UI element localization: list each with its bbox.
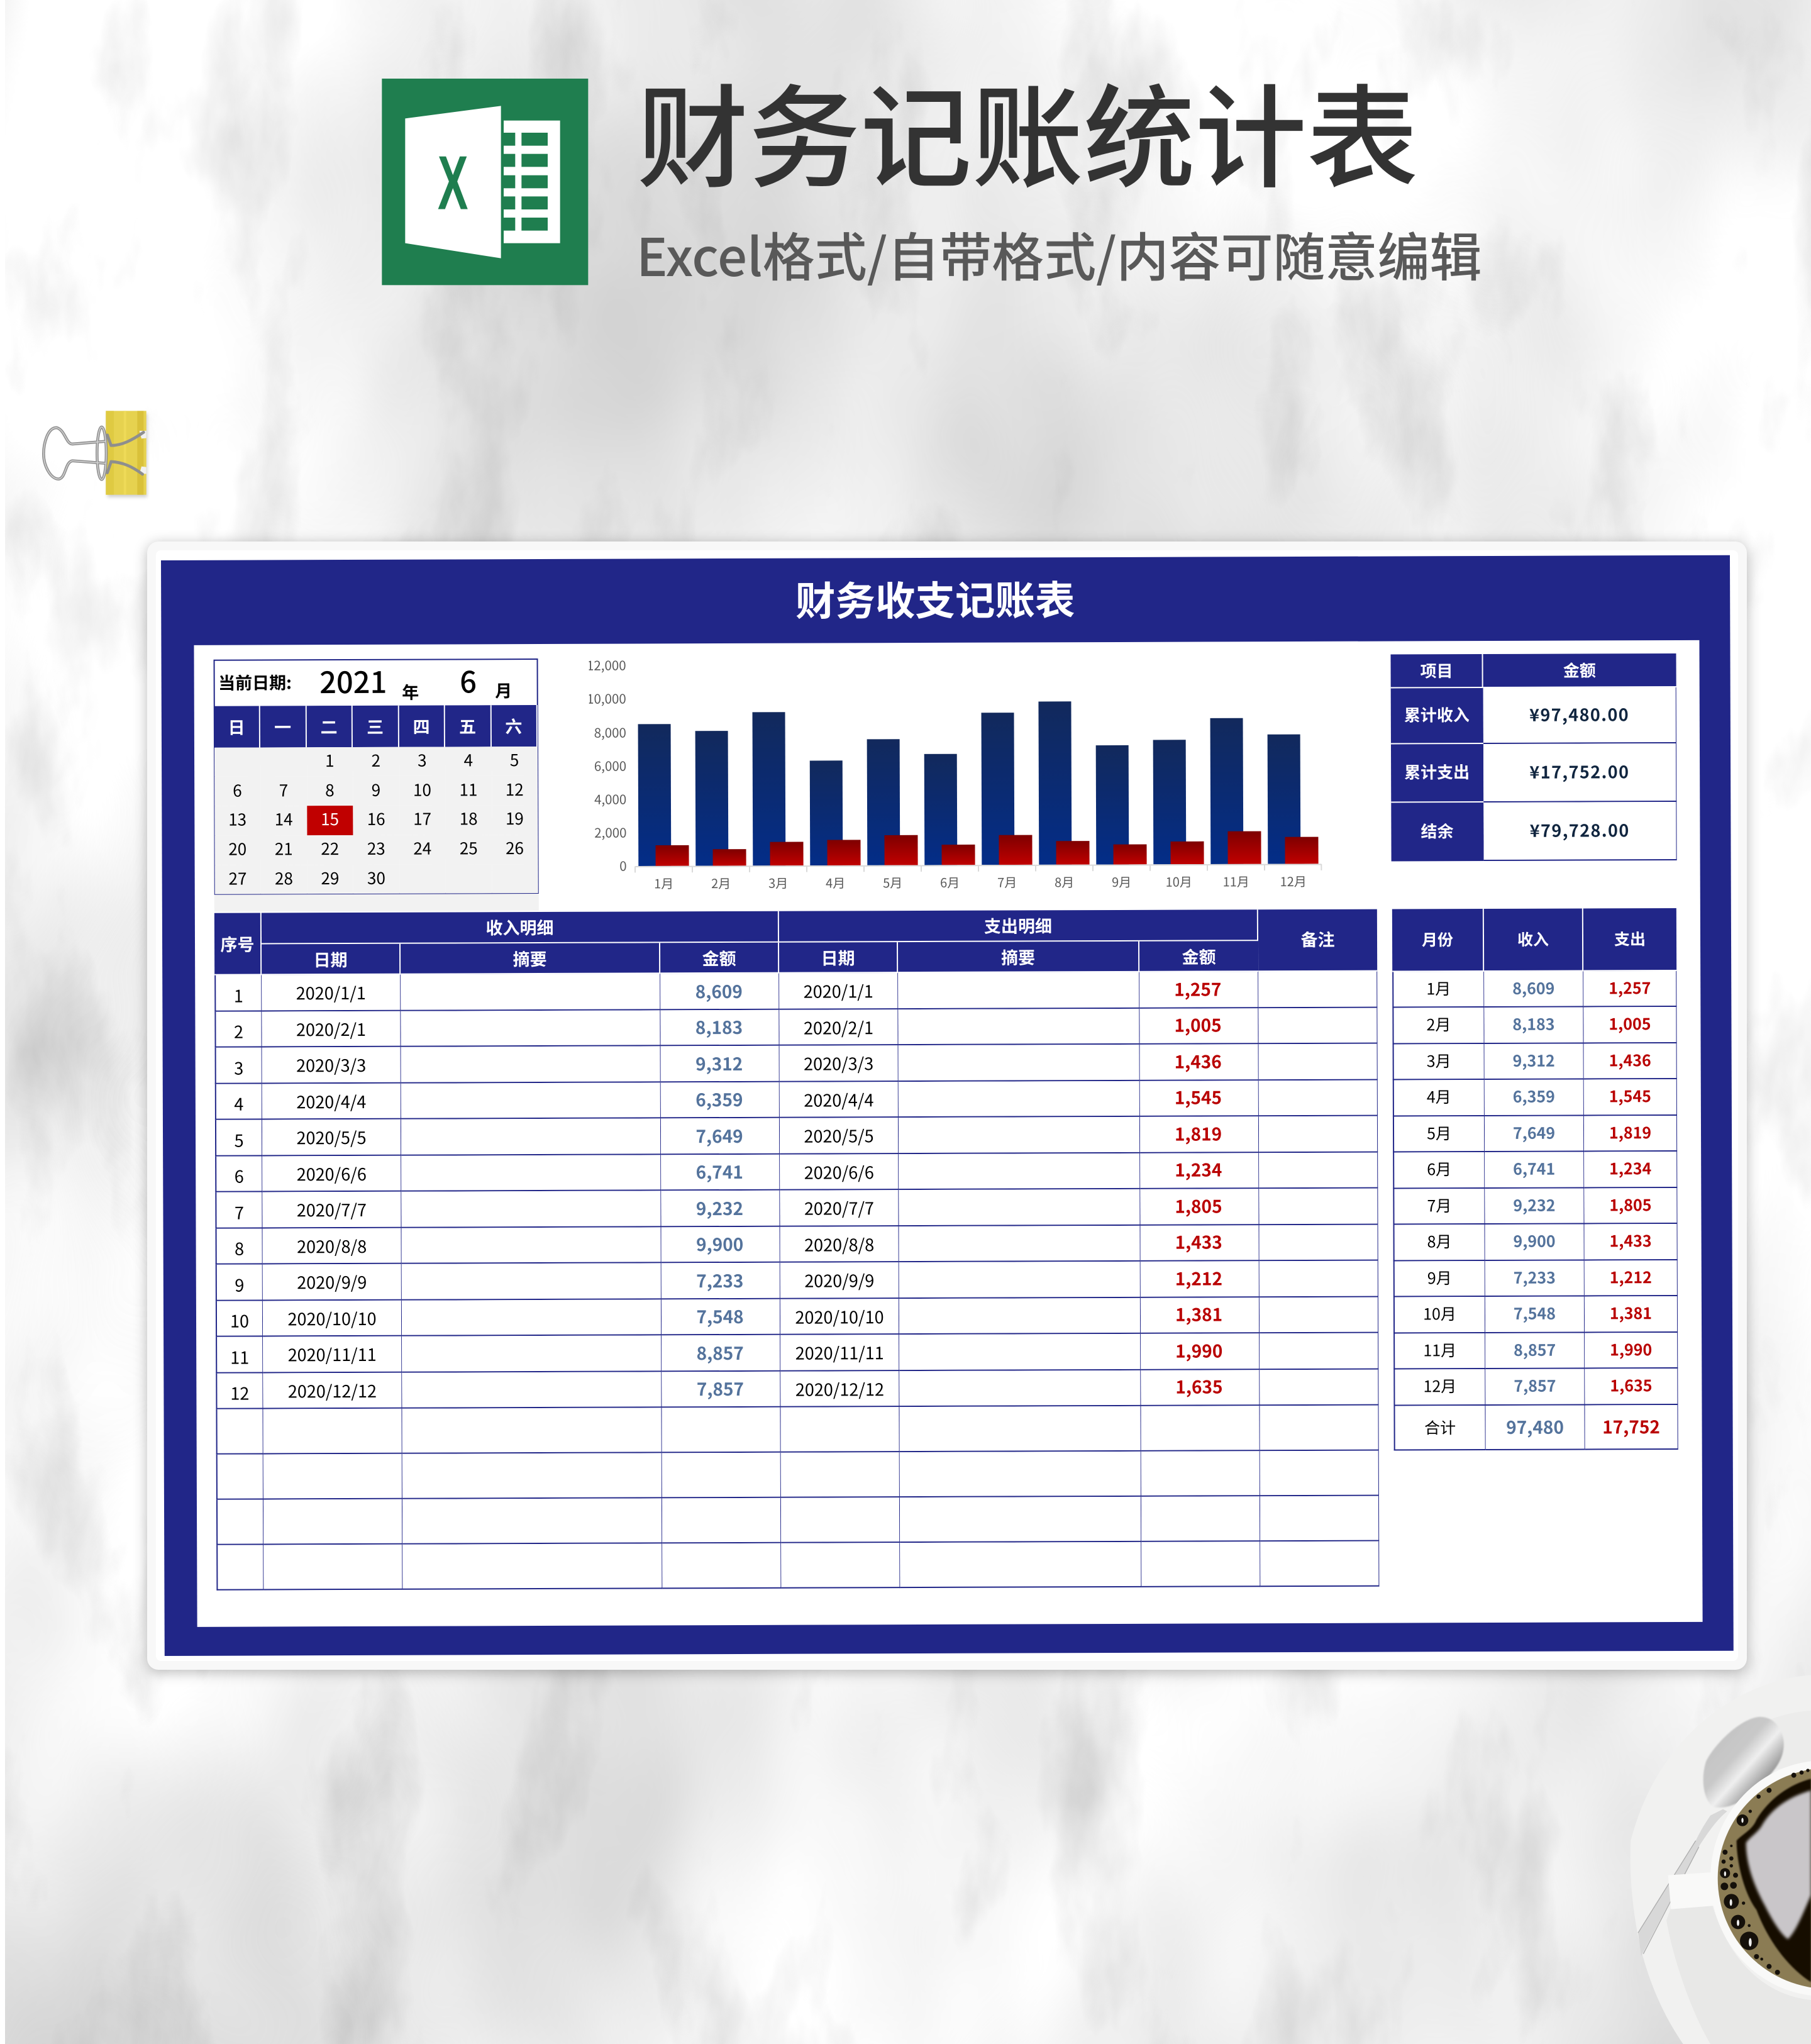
- table: monthly totals: 1,433: [1609, 1229, 1652, 1252]
- calendar grid: 24: [413, 836, 431, 860]
- table: monthly totals: [1392, 908, 1678, 1450]
- table: income and expense details: 2020/5/5: [804, 1123, 874, 1148]
- y axis labels: 6,000: [594, 756, 626, 775]
- detail header: 日期: [314, 947, 348, 971]
- table: income and expense details: 8,183: [695, 1014, 743, 1040]
- expense bars: [655, 831, 1319, 866]
- table: monthly totals: 9月: [1427, 1266, 1452, 1289]
- calendar grid: 17: [413, 807, 431, 830]
- table: income and expense details: 2020/12/12: [288, 1378, 377, 1402]
- table: monthly totals: 1,381: [1610, 1301, 1652, 1325]
- table: monthly totals: 1,257: [1609, 976, 1651, 999]
- income bars: [638, 701, 1300, 866]
- monthly header: 收入: [1517, 928, 1549, 950]
- panel: grey filler below calendar: [214, 893, 538, 912]
- calendar grid: 2: [372, 748, 380, 772]
- icon: coffee cup on saucer: [1631, 1716, 1811, 2044]
- table: monthly totals: 8,857: [1514, 1338, 1556, 1361]
- calendar grid: 14: [275, 808, 293, 831]
- reflection: [1746, 1791, 1811, 1939]
- table: income and expense details: 2020/8/8: [804, 1231, 874, 1256]
- table: income and expense details: 5: [234, 1127, 244, 1152]
- detail header: 收入明细: [485, 914, 554, 940]
- calendar grid: 29: [321, 866, 339, 889]
- table: income and expense details: 3: [234, 1055, 243, 1079]
- icon: binder clip: [42, 411, 148, 499]
- year unit: 年: [402, 679, 419, 703]
- weekday header: 六: [505, 713, 522, 738]
- x axis labels: 9月: [1112, 872, 1131, 891]
- table: monthly totals: 1,212: [1610, 1265, 1652, 1288]
- balance: [1391, 802, 1677, 861]
- table: monthly totals: 1,805: [1609, 1193, 1652, 1216]
- calendar grid: 16: [367, 807, 385, 830]
- table: income and expense details: 9,312: [695, 1051, 743, 1076]
- table: income and expense details: 6,359: [695, 1087, 743, 1112]
- icon: Excel logo: [382, 79, 589, 286]
- table: monthly totals: 1,819: [1609, 1121, 1651, 1143]
- table: monthly totals: 1,005: [1609, 1012, 1651, 1035]
- table: income and expense details: 2020/3/3: [804, 1050, 873, 1075]
- table: monthly totals: 3月: [1427, 1049, 1451, 1072]
- calendar grid: 3: [418, 748, 427, 772]
- table: income and expense details: 8: [235, 1236, 244, 1260]
- table: income and expense details: 2020/2/1: [296, 1016, 366, 1041]
- table: income and expense details: 8,609: [695, 979, 743, 1004]
- detail header: 金额: [1182, 943, 1216, 968]
- y axis labels: [587, 655, 627, 875]
- table: income and expense details: 8,857: [697, 1340, 744, 1365]
- calendar grid: 21: [275, 837, 293, 860]
- table: monthly totals: 6月: [1427, 1157, 1451, 1180]
- calendar grid: 23: [367, 836, 385, 860]
- calendar grid: 19: [506, 807, 524, 830]
- calendar grid: 27: [228, 867, 246, 890]
- x axis labels: 8月: [1055, 872, 1074, 891]
- summary header: 金额: [1563, 658, 1596, 681]
- calendar grid: 28: [275, 866, 293, 889]
- table: monthly totals: 12月: [1423, 1374, 1456, 1397]
- y axis labels: 4,000: [594, 789, 626, 808]
- weekday header: 日: [228, 714, 245, 739]
- table: monthly totals: 9,900: [1513, 1230, 1556, 1252]
- month: 6: [460, 658, 477, 701]
- spoon: [1638, 1809, 1727, 1956]
- foam: [1718, 1768, 1811, 1989]
- month unit: 月: [495, 677, 512, 702]
- table: income and expense details: 1,990: [1175, 1338, 1222, 1363]
- table: income and expense details: 1,257: [1174, 976, 1221, 1001]
- calendar grid: 12: [506, 777, 524, 801]
- monthly total row: 97,480: [1506, 1414, 1564, 1440]
- heading: sheet title: 财务收支记账表: [795, 569, 1075, 628]
- table: monthly totals: 1,990: [1610, 1338, 1652, 1360]
- table: monthly totals: 1,436: [1609, 1048, 1651, 1071]
- table: monthly totals: 1,635: [1610, 1374, 1652, 1397]
- calendar grid: 7: [279, 778, 288, 801]
- table: monthly totals: 8月: [1427, 1230, 1452, 1253]
- detail header: 摘要: [1001, 944, 1035, 969]
- table: income and expense details: 7,857: [697, 1376, 744, 1401]
- detail header: 序号: [220, 931, 255, 956]
- panel: white content area: [194, 640, 1703, 1627]
- weekday header: 三: [367, 714, 384, 738]
- table: income and expense details: 2020/2/1: [804, 1014, 873, 1039]
- calendar grid: 15: [321, 808, 339, 831]
- table: income and expense details: 2020/10/10: [287, 1306, 377, 1330]
- calendar grid: 4: [464, 748, 473, 771]
- y axis labels: 2,000: [594, 823, 626, 841]
- detail header: 金额: [702, 945, 736, 970]
- table: income and expense details: 1,819: [1175, 1121, 1222, 1146]
- x axis labels: [654, 872, 1307, 892]
- panel: finance sheet: [161, 555, 1734, 1656]
- table: income and expense details: 2020/9/9: [297, 1269, 367, 1294]
- table: income and expense details: 2020/6/6: [297, 1161, 367, 1186]
- table: income and expense details: 6: [235, 1164, 244, 1188]
- cup rim: [1734, 1762, 1807, 1806]
- table: income and expense details: 2020/11/11: [795, 1340, 884, 1365]
- calendar grid: 9: [372, 778, 380, 801]
- table: income and expense details: 2020/4/4: [804, 1087, 873, 1111]
- table: monthly totals: 8,183: [1512, 1013, 1555, 1035]
- table: monthly totals: 11月: [1423, 1338, 1456, 1361]
- table: monthly totals: 7月: [1427, 1194, 1451, 1216]
- detail header: 备注: [1301, 926, 1335, 951]
- cumulative expense: ¥17,752.00: [1529, 758, 1629, 783]
- table: income and expense details: 6,741: [696, 1159, 743, 1184]
- table: income and expense details: 2020/11/11: [288, 1341, 377, 1367]
- table: monthly totals: 1,234: [1609, 1157, 1651, 1180]
- table: monthly totals: 6,359: [1513, 1085, 1555, 1108]
- calendar grid: 20: [228, 837, 246, 860]
- title: 财务记账统计表: [637, 49, 1419, 211]
- table: income and expense details: 1,381: [1175, 1302, 1222, 1327]
- monthly total row: 17,752: [1602, 1414, 1660, 1439]
- calendar grid: 26: [506, 836, 524, 859]
- x axis labels: 10月: [1166, 872, 1192, 891]
- table: income and expense details: 2020/10/10: [795, 1304, 884, 1328]
- table: monthly totals: 1,545: [1609, 1084, 1651, 1108]
- table: monthly totals: 9,312: [1513, 1048, 1555, 1072]
- x axis labels: 4月: [826, 873, 845, 891]
- x axis labels: 1月: [654, 874, 673, 892]
- table: income and expense details: 2020/7/7: [297, 1197, 367, 1222]
- table: income and expense details: 2020/6/6: [804, 1159, 874, 1184]
- table: income and expense details: 2020/1/1: [296, 980, 366, 1005]
- balance: 结余: [1421, 819, 1453, 842]
- table: income and expense details: 7: [235, 1199, 244, 1224]
- table: income and expense details: 2020/9/9: [804, 1267, 874, 1292]
- icon: Excel logo: X: [438, 140, 468, 226]
- calendar grid: 11: [459, 777, 477, 801]
- table: monthly totals: 7,857: [1514, 1374, 1556, 1397]
- x axis labels: 11月: [1223, 872, 1249, 890]
- x axis labels: 7月: [997, 872, 1017, 891]
- table: monthly totals: 2月: [1426, 1013, 1451, 1036]
- weekday header: 五: [459, 713, 476, 738]
- table: income and expense details: [214, 909, 1379, 1591]
- table: monthly totals: 8,609: [1512, 976, 1554, 999]
- monthly total row: 合计: [1424, 1416, 1456, 1438]
- table: monthly totals: 5月: [1427, 1121, 1451, 1144]
- monthly header: 支出: [1614, 927, 1646, 950]
- table: income and expense details: 2: [234, 1019, 243, 1043]
- bubbles: [1720, 1769, 1810, 1975]
- table: income and expense details: 2020/5/5: [296, 1125, 367, 1150]
- cumulative expense: [1390, 743, 1676, 803]
- subtitle: Excel格式/自带格式/内容可随意编辑: [636, 216, 1482, 291]
- table: income and expense details: 12: [230, 1380, 249, 1405]
- table: monthly totals: 4月: [1427, 1085, 1451, 1108]
- monthly header: [1392, 908, 1676, 972]
- table: income and expense details: 1,805: [1175, 1193, 1222, 1218]
- calendar grid: 1: [325, 748, 335, 772]
- table: income and expense details: 7,649: [695, 1123, 743, 1148]
- summary header: [1390, 653, 1677, 861]
- table: income and expense details: 1,635: [1175, 1374, 1223, 1399]
- bar chart: monthly income and expense: [589, 655, 1322, 892]
- table: income and expense details: 2020/8/8: [297, 1233, 367, 1258]
- table: income and expense details: 1,212: [1175, 1265, 1222, 1291]
- table: summary: [1391, 653, 1677, 862]
- table: income and expense details: 11: [230, 1344, 249, 1369]
- calendar grid: 18: [460, 807, 478, 830]
- x axis: [635, 864, 1321, 873]
- table: income and expense details: 2020/4/4: [296, 1089, 366, 1113]
- table: income and expense details: 2020/12/12: [795, 1376, 884, 1401]
- weekday header: [215, 705, 538, 748]
- handle: [1669, 1874, 1713, 1909]
- weekday header: 四: [413, 714, 430, 738]
- table: monthly totals: 1月: [1426, 977, 1451, 999]
- x axis labels: 2月: [711, 874, 731, 892]
- table: income and expense details: 1,433: [1175, 1230, 1222, 1255]
- y axis labels: 0: [619, 856, 627, 875]
- detail header: 日期: [821, 945, 855, 969]
- coffee: [1737, 1779, 1811, 1982]
- table: monthly totals: 10月: [1423, 1302, 1456, 1325]
- table: income and expense details: 7,233: [696, 1268, 743, 1293]
- x axis labels: 5月: [883, 873, 902, 891]
- calendar grid: 5: [510, 748, 519, 771]
- monthly header: 月份: [1422, 928, 1453, 951]
- monthly total row: [1393, 1405, 1678, 1450]
- weekday header: 一: [274, 714, 291, 738]
- table: income and expense details: 4: [234, 1091, 243, 1116]
- table: income and expense details: 2020/3/3: [296, 1052, 366, 1077]
- calendar grid: 30: [367, 866, 385, 889]
- saucer: [1631, 1809, 1811, 2044]
- cumulative income: 累计收入: [1404, 703, 1470, 726]
- table: income and expense details: 9,900: [696, 1231, 743, 1257]
- y axis labels: 8,000: [594, 723, 626, 742]
- calendar grid: 13: [228, 808, 246, 831]
- table: monthly totals: 7,233: [1514, 1265, 1556, 1289]
- detail header: 摘要: [513, 946, 547, 970]
- calendar grid: 25: [460, 836, 478, 860]
- cumulative income: ¥97,480.00: [1529, 701, 1629, 726]
- table: monthly totals: 7,649: [1513, 1121, 1555, 1144]
- summary header: 项目: [1421, 658, 1453, 682]
- table: monthly totals: 6,741: [1513, 1157, 1555, 1180]
- calendar grid: 22: [321, 836, 339, 860]
- table: income and expense details: 7,548: [696, 1304, 744, 1329]
- panel: card: [147, 542, 1747, 1670]
- x axis labels: 12月: [1280, 872, 1307, 890]
- panel: calendar: [213, 658, 538, 894]
- table: income and expense details: 1,436: [1175, 1048, 1222, 1074]
- table: income and expense details: 9: [235, 1272, 244, 1296]
- table: income and expense details: 9,232: [696, 1196, 743, 1221]
- table: income and expense details: 2020/7/7: [804, 1195, 874, 1220]
- current date label: 当前日期:: [218, 669, 292, 694]
- table: income and expense details: 1: [234, 982, 243, 1007]
- table: income and expense details: 1,545: [1175, 1085, 1222, 1110]
- calendar grid: 6: [233, 778, 242, 801]
- table: income and expense details: 1,005: [1174, 1013, 1222, 1038]
- detail header: 支出明细: [984, 913, 1052, 938]
- cumulative income: [1390, 687, 1676, 744]
- x axis labels: 6月: [940, 873, 960, 891]
- detail header: [214, 909, 1377, 975]
- balance: ¥79,728.00: [1530, 817, 1630, 841]
- weekday header: 二: [321, 714, 338, 738]
- table: monthly totals: 9,232: [1513, 1193, 1556, 1216]
- cumulative expense: 累计支出: [1404, 760, 1470, 783]
- calendar grid: 8: [325, 778, 335, 801]
- x axis labels: 3月: [768, 874, 788, 892]
- table: income and expense details: 10: [230, 1308, 249, 1333]
- calendar grid: 10: [413, 777, 431, 801]
- table: monthly totals: 7,548: [1514, 1302, 1556, 1325]
- year: 2021: [319, 658, 387, 702]
- table: income and expense details: 2020/1/1: [804, 978, 873, 1003]
- calendar grid: [214, 705, 538, 894]
- table: income and expense details: 1,234: [1175, 1157, 1222, 1182]
